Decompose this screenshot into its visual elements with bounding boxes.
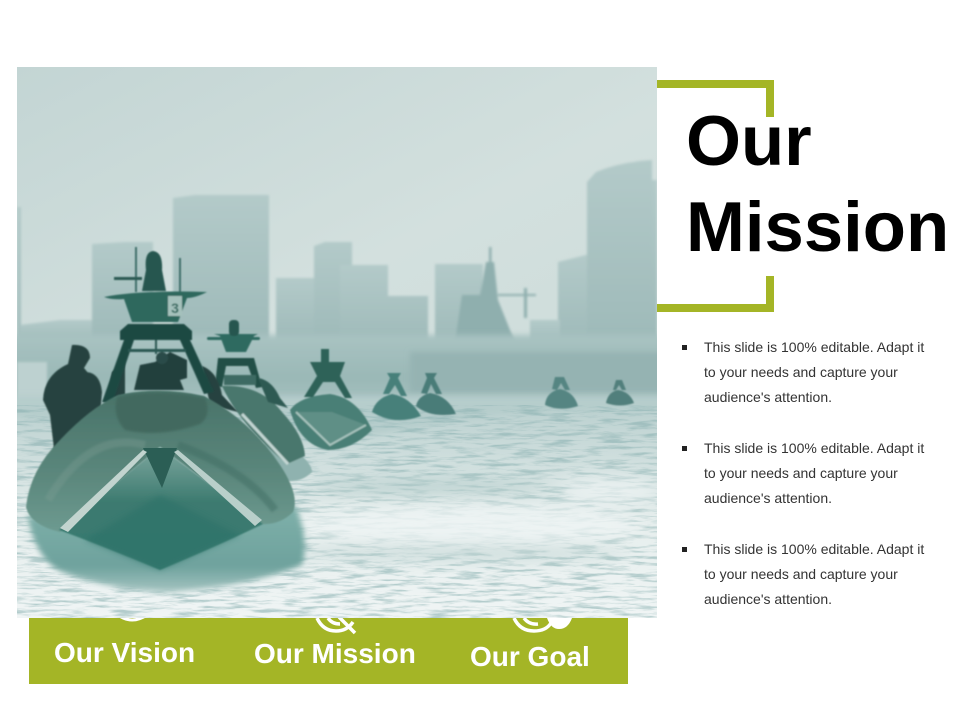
title: Mission [686,187,949,266]
bullet text 2 [682,440,924,506]
hull [59,447,263,570]
spray [290,478,660,559]
bullet text 3: audience's attention. [704,591,832,607]
wake shadow [27,505,305,592]
title [686,101,949,266]
label: Our Mission: Our Mission [254,638,416,669]
tower: 3 [171,300,179,316]
title bracket [657,80,774,312]
soldiers [43,345,238,449]
bullet text 2: audience's attention. [704,490,832,506]
bullet text 3: This slide is 100% editable. Adapt it [704,541,924,557]
photo: boats on water with city skyline [17,67,657,618]
inflatable tube [26,391,295,532]
boat 7 [606,380,634,406]
label: Our Vision: Our Vision [54,637,195,668]
icon: vision arc [120,618,145,622]
boat 5 [416,373,456,415]
bullet text 1: to your needs and capture your [704,364,898,380]
hull strips [60,450,147,532]
bullet text 2: This slide is 100% editable. Adapt it [704,440,924,456]
icon: goal circles [512,618,572,633]
boat 3 [290,349,372,450]
bullet text 3: to your needs and capture your [704,566,898,582]
far boats [290,349,634,450]
panel: green label band [29,600,628,684]
boat 4 [372,373,421,420]
bullet text 3 [682,541,924,607]
main boat [26,247,305,592]
title: Our [686,101,812,180]
skyline buildings [17,160,657,400]
tower [102,247,214,404]
camera operator [134,352,187,390]
sky [17,67,657,618]
boat 6 [545,377,578,409]
harbour haze band [10,335,670,407]
bullet text 2: to your needs and capture your [704,465,898,481]
bullet text 1: This slide is 100% editable. Adapt it [704,339,924,355]
bullet text 1: audience's attention. [704,389,832,405]
label: Our Goal: Our Goal [470,641,590,672]
water [17,402,657,618]
second boat [207,320,312,481]
icon: mission target [316,618,356,634]
warship [450,247,536,352]
bullet text 1 [682,339,924,405]
